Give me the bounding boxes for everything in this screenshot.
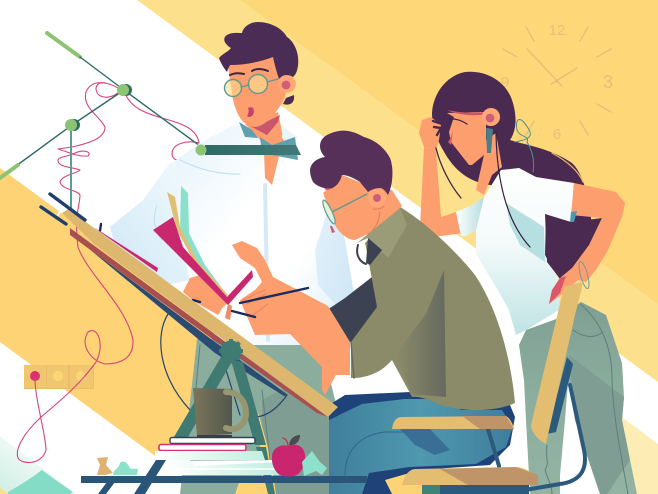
pencils	[100, 224, 308, 317]
woman long hair behind	[432, 72, 594, 282]
desk lamp arm	[0, 33, 200, 212]
lamp head	[196, 144, 301, 156]
apple	[272, 435, 305, 476]
table legs	[98, 460, 166, 494]
drawing board	[41, 194, 338, 417]
wall clock: 6	[553, 126, 561, 143]
wall clock: 3	[603, 72, 613, 92]
wall clock: 12	[549, 22, 565, 39]
seated man hair	[310, 131, 392, 195]
bow tie	[260, 137, 298, 160]
standing man neck and collar	[239, 112, 298, 146]
woman head	[433, 108, 534, 247]
chair	[392, 282, 585, 494]
seated man olive shirt	[351, 207, 515, 410]
woman shirt	[476, 168, 602, 335]
table top	[81, 476, 367, 483]
wall socket	[24, 365, 94, 389]
wall clock: 9	[501, 74, 509, 91]
standing man shirt	[110, 122, 355, 345]
seated man glasses and collar	[321, 194, 407, 265]
crumpled mint paper	[113, 451, 327, 476]
woman trousers	[519, 302, 637, 494]
crumpled tan paper	[97, 457, 113, 475]
standing man hair	[219, 22, 298, 79]
woman raised arm and hand	[419, 117, 484, 238]
right sleeve	[315, 165, 355, 312]
coffee mug	[193, 388, 246, 438]
held paper sheets	[153, 186, 253, 320]
standing man head	[219, 22, 298, 127]
board stand	[171, 339, 275, 494]
left sleeve	[110, 160, 190, 285]
book stack	[155, 438, 280, 475]
seated man jeans	[329, 392, 515, 494]
seated man forearms and hands	[232, 241, 350, 395]
standing man trousers	[180, 335, 345, 494]
standing man face details	[224, 69, 278, 117]
seated man undershirt	[327, 277, 378, 342]
wall clock	[501, 22, 613, 143]
pink cable	[17, 83, 199, 463]
mint mound bottom left	[8, 470, 73, 494]
thin wires under board	[161, 314, 287, 417]
woman right arm and hand	[549, 183, 625, 304]
seated man head	[310, 131, 402, 240]
paper on the board	[90, 225, 160, 274]
